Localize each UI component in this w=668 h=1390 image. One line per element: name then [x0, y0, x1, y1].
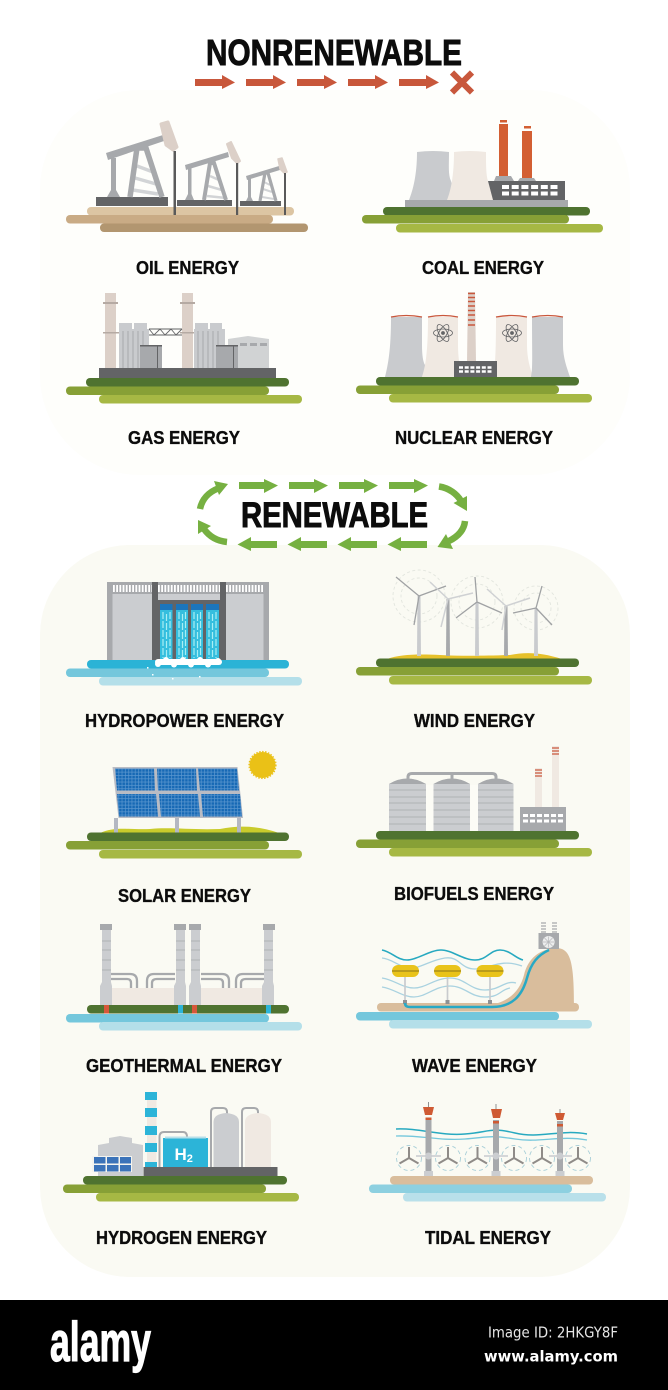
icon: atom left [434, 323, 452, 343]
heading: renewable: RENEWABLE [241, 496, 428, 535]
illustration: wind energy [356, 570, 592, 684]
illustration: geothermal energy [66, 927, 302, 1030]
panel: nonrenewable background [40, 90, 630, 475]
label: hydropower energy: HYDROPOWER ENERGY [85, 711, 284, 731]
label: solar energy: SOLAR ENERGY [118, 886, 251, 906]
footer website: www.alamy.com [484, 1348, 618, 1366]
panel: renewable background [40, 545, 630, 1277]
label: gas energy: GAS ENERGY [128, 428, 240, 448]
illustration: biofuels energy [356, 746, 592, 856]
footer logo: alamy [50, 1310, 151, 1373]
label: tidal energy: TIDAL ENERGY [425, 1228, 551, 1248]
illustration: solar energy [66, 752, 302, 858]
illustration: hydropower energy [66, 582, 302, 686]
icon: sun [249, 752, 276, 778]
icon: red cross [452, 72, 472, 92]
arrows: nonrenewable one-way row [195, 72, 472, 92]
footer image id: Image ID: 2HKGY8F [488, 1324, 618, 1342]
illustration: tidal energy [369, 1102, 606, 1202]
illustration: oil energy [66, 122, 308, 232]
footer bar [0, 1300, 668, 1390]
illustration: hydrogen energy [63, 1092, 299, 1202]
label: biofuels energy: BIOFUELS ENERGY [394, 884, 554, 904]
icon: atom right [502, 323, 522, 343]
illustration: coal energy [362, 120, 603, 232]
label: geothermal energy: GEOTHERMAL ENERGY [86, 1056, 282, 1076]
illustration: gas energy [66, 293, 302, 404]
illustration: nuclear energy [356, 292, 592, 402]
illustration: wave energy [356, 923, 592, 1028]
label: wave energy: WAVE ENERGY [412, 1056, 537, 1076]
icon: H2 symbol: 2 [187, 1153, 193, 1165]
label: hydrogen energy: HYDROGEN ENERGY [96, 1228, 267, 1248]
arrows: renewable cycle [198, 479, 467, 551]
label: wind energy: WIND ENERGY [414, 711, 535, 731]
label: oil energy: OIL ENERGY [136, 258, 239, 278]
label: coal energy: COAL ENERGY [422, 258, 544, 278]
icon: H2 symbol: H [174, 1145, 187, 1164]
foam at dam base [147, 657, 222, 680]
label: nuclear energy: NUCLEAR ENERGY [395, 428, 553, 448]
heading: nonrenewable: NONRENEWABLE [206, 32, 462, 73]
